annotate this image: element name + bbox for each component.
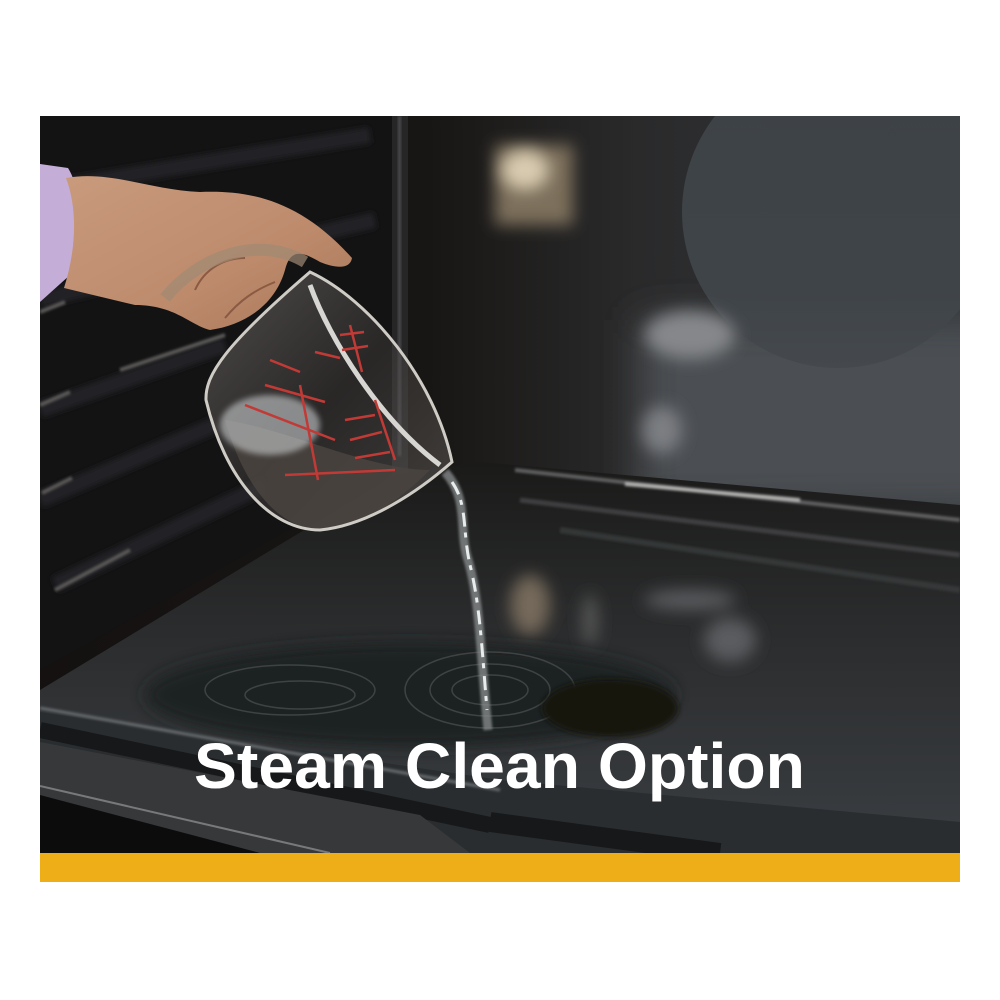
floor rear lip highlights (515, 470, 960, 590)
circular reflector on back wall (682, 116, 960, 321)
banner: yellow bar (40, 853, 960, 882)
water stream (445, 472, 488, 730)
icon: glass measuring cup (165, 250, 452, 530)
lower back wall sheen (640, 320, 1000, 510)
back wall (40, 116, 960, 690)
dark soil spot (542, 679, 678, 737)
oven divider column (392, 116, 408, 476)
front lower frame and door seal (40, 708, 960, 853)
left wall with rack rails (40, 128, 376, 594)
back wall reflections (495, 145, 735, 454)
title: Steam Clean Option (194, 730, 805, 802)
floor reflections (510, 575, 756, 662)
icon: hand (64, 176, 352, 330)
oven floor (40, 469, 960, 814)
panel: oven interior photo (40, 116, 960, 853)
water pool on floor (145, 643, 675, 747)
icon: sleeve (40, 164, 78, 302)
